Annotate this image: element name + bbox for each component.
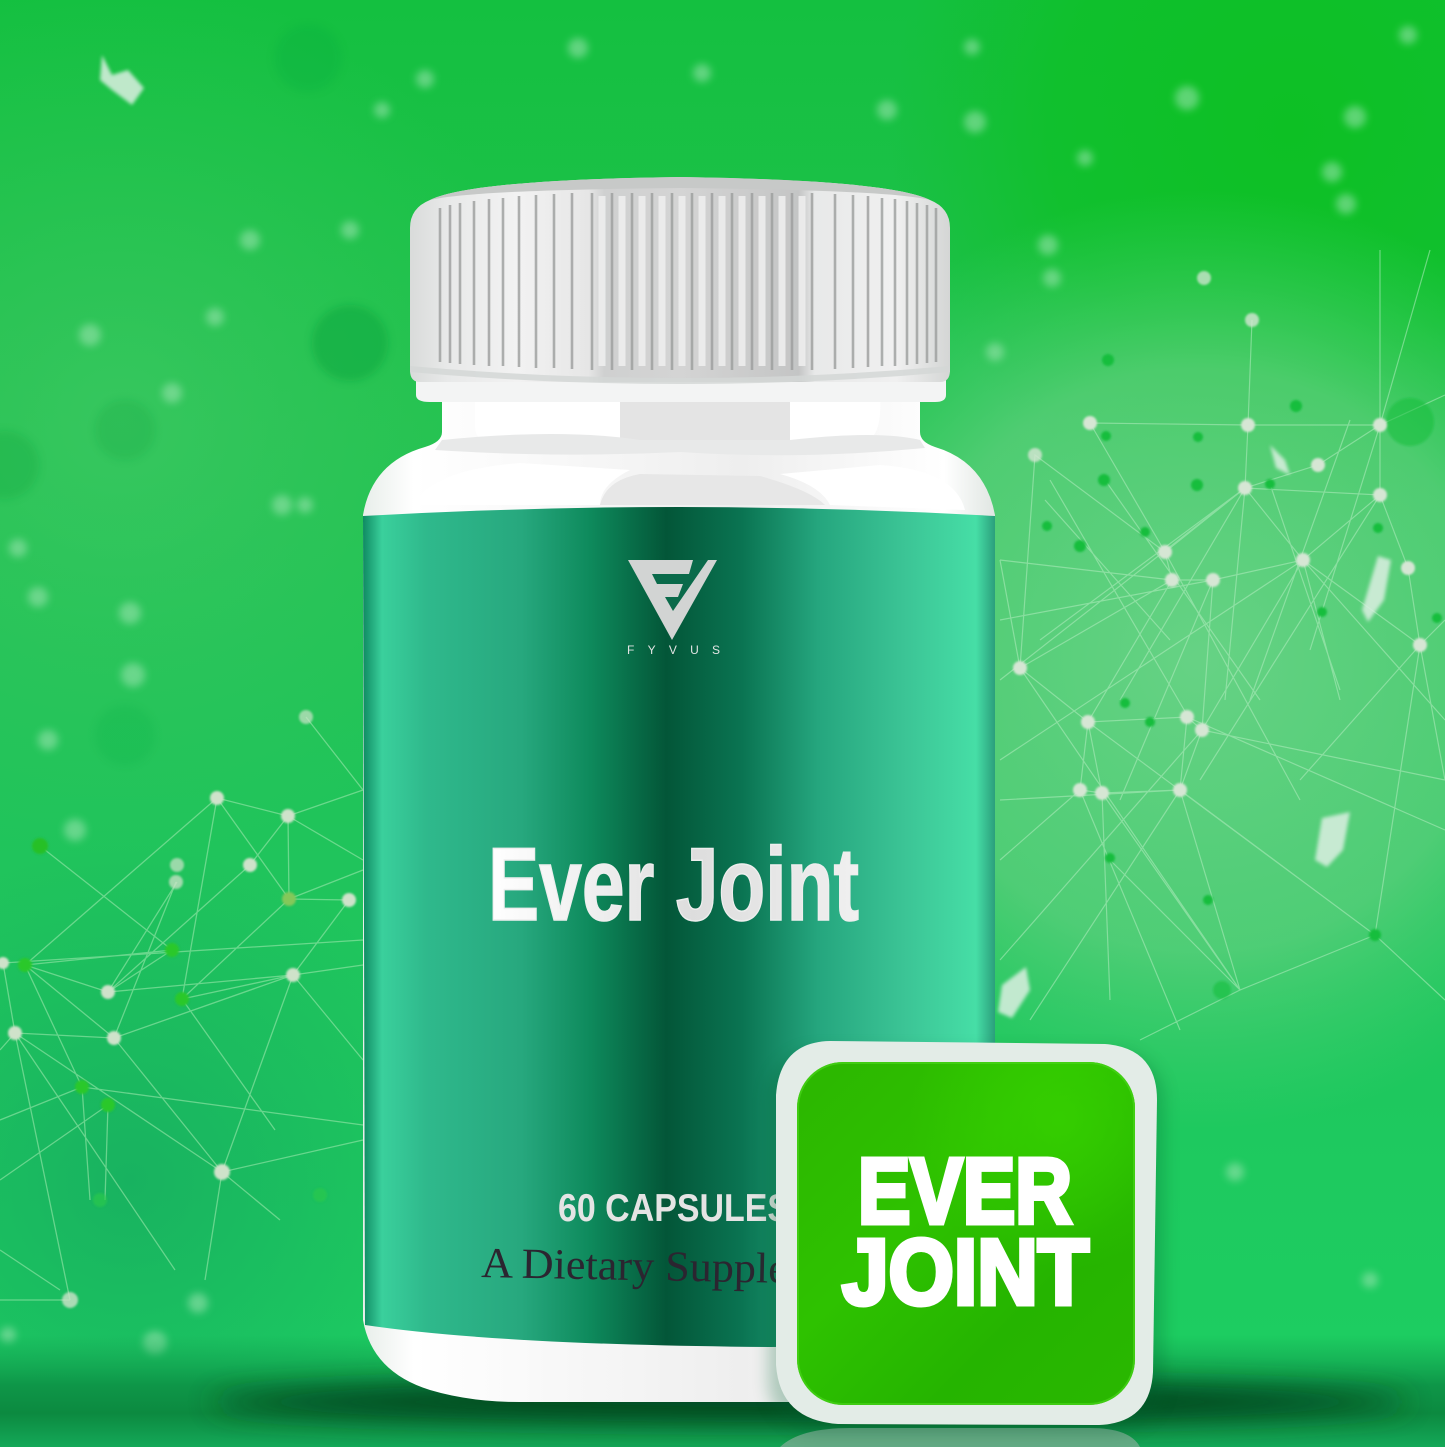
- badge face: [797, 1062, 1135, 1405]
- capsule count: 60 CAPSULES: [558, 1187, 790, 1230]
- bottle lip: [416, 378, 946, 402]
- bottle cap: [410, 177, 950, 384]
- bottle: [363, 177, 995, 1402]
- logo wordmark: FYVUS: [627, 643, 720, 657]
- ground shadow: [210, 1382, 1410, 1422]
- badge text JOINT: JOINT: [842, 1220, 1089, 1324]
- background: right network pale nodes: [1013, 271, 1427, 800]
- badge frame: [776, 1041, 1157, 1425]
- logo triangle: [628, 560, 717, 640]
- badge text EVER: EVER: [858, 1139, 1072, 1243]
- label wrap: [363, 507, 995, 1347]
- background: left network nodes: [0, 710, 356, 1308]
- background: right network dark nodes: [1042, 354, 1442, 999]
- brand logo: [627, 560, 720, 657]
- background: left network lines: [0, 717, 363, 1300]
- badge reflection: [780, 1428, 1140, 1447]
- bottle body: [363, 400, 995, 1402]
- cap rib highlights: [602, 196, 802, 366]
- dietary supplement line: A Dietary Supplement: [481, 1240, 877, 1295]
- bottle shoulder highlights: [415, 395, 965, 510]
- Ever Joint badge: [768, 1041, 1164, 1432]
- background: pale shards: [100, 55, 1391, 1018]
- ground band: [0, 1335, 1445, 1447]
- background: dark blurred circles: [0, 24, 388, 765]
- cap ribs: [440, 193, 936, 370]
- badge shadow: [768, 1050, 1164, 1432]
- background: right network lines: [1000, 250, 1445, 1040]
- product name: Ever Joint: [488, 827, 859, 943]
